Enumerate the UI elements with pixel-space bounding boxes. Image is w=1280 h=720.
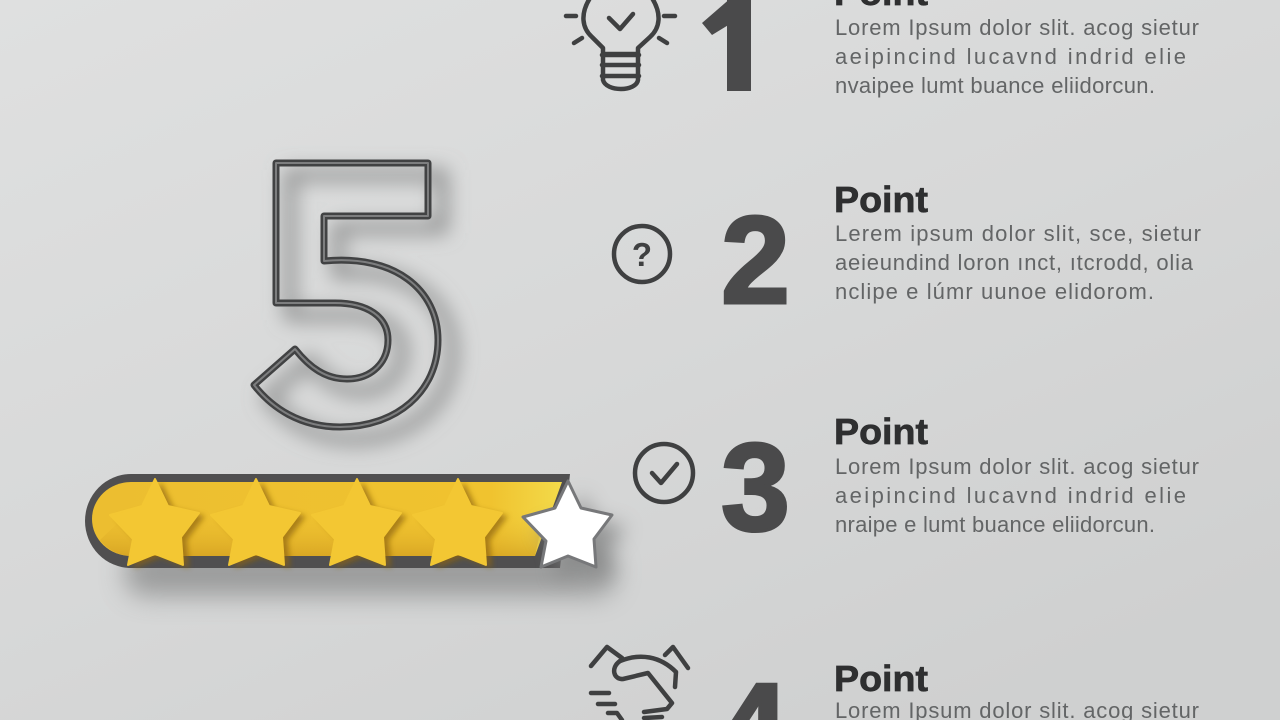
star 5 empty white xyxy=(523,481,626,579)
icon: question mark circle xyxy=(614,226,670,282)
body text: nclipe e lúmr uunoe elidorom. xyxy=(835,279,1154,304)
body text xyxy=(835,221,1201,304)
body text: nvaipee lumt buance eliidorcun. xyxy=(835,73,1155,98)
heading: Point xyxy=(834,179,928,220)
heading: Point xyxy=(834,411,928,452)
bar yellow fill xyxy=(92,482,562,556)
star 1 xyxy=(110,479,205,568)
icon: check circle xyxy=(635,444,693,502)
body text: aeipincind lucavnd indrid elie xyxy=(835,483,1186,508)
icon: light bulb xyxy=(566,0,675,89)
bar shadow xyxy=(125,548,615,596)
body text: Lorem Ipsum dolor slit. acog sietur xyxy=(835,454,1199,479)
heading: Point xyxy=(834,658,928,699)
big outlined number 5 xyxy=(254,163,452,439)
number 2: 2 xyxy=(721,192,790,330)
body text: Lorem Ipsum dolor slit. acog sietur xyxy=(835,15,1199,40)
rating bar with stars xyxy=(85,474,626,596)
star 3 xyxy=(312,479,407,568)
body text xyxy=(835,454,1199,537)
body text: aeipincind lucavnd indrid elie xyxy=(835,44,1186,69)
bar frame xyxy=(85,474,570,568)
point 2 row xyxy=(614,179,1201,330)
point 1 row xyxy=(564,0,1199,98)
point 4 row xyxy=(591,647,1199,720)
icon: question mark circle: ? xyxy=(632,236,652,273)
point 3 row xyxy=(635,411,1199,557)
body text: aeieundind loron ınct, ıtcrodd, olia xyxy=(835,250,1194,275)
body text: nraipe e lumt buance eliidorcun. xyxy=(835,512,1155,537)
number 3: 3 xyxy=(721,419,790,557)
star 2 xyxy=(211,479,306,568)
number 1 xyxy=(702,0,751,91)
body text: Lerem ipsum dolor slit, sce, sietur xyxy=(835,221,1201,246)
star 4 xyxy=(413,479,508,568)
body text xyxy=(835,15,1199,98)
icon: handshake xyxy=(591,647,688,720)
